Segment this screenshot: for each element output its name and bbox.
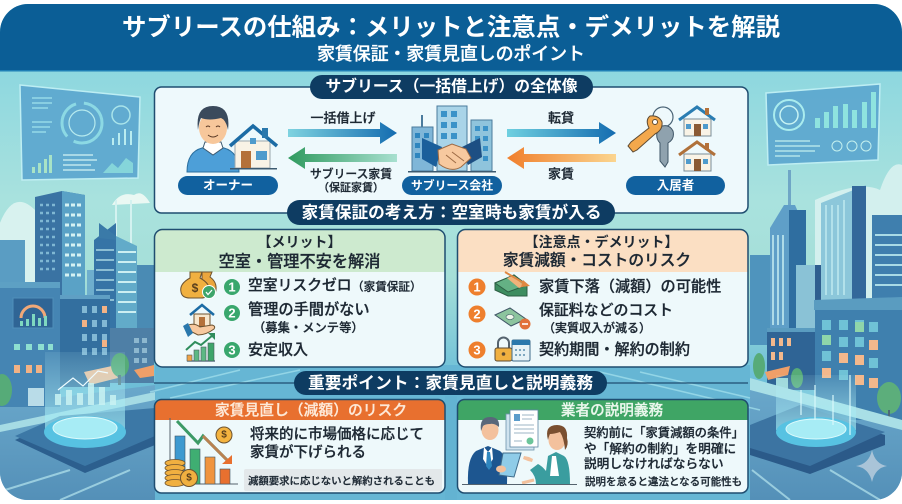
merit item 1: 空室リスクゼロ	[248, 277, 352, 294]
demerit item 2	[468, 302, 673, 335]
sparkle mark	[856, 450, 887, 482]
duty body text: 説明を怠ると違法となる可能性も	[585, 475, 742, 488]
icon: keys	[628, 107, 673, 167]
arrow: rent: 家賃	[548, 166, 574, 182]
icon: businesswoman	[462, 425, 577, 485]
icon: blue roof house	[679, 107, 715, 136]
heading pill: rent guarantee: 家賃保証の考え方：空室時も家賃が入る	[302, 202, 602, 222]
icon: rising chart	[186, 333, 215, 361]
risk body text: 家賃が下げられる	[250, 443, 366, 461]
label: sublease company	[402, 176, 502, 195]
right front building	[815, 308, 902, 420]
demerit item 1: 1	[473, 280, 481, 294]
duty header text: 業者の説明義務	[561, 402, 663, 419]
label: tenant	[626, 176, 725, 195]
demerits heading: 【注意点・デメリット】	[524, 234, 678, 250]
icon: company buildings and handshake	[408, 106, 496, 172]
title: サブリースの仕組み：メリットと注意点・デメリットを解説	[122, 14, 781, 42]
arrow: master lease: 一括借上げ	[310, 110, 376, 126]
icon: money bags	[181, 272, 216, 298]
icon: padlock and calendar	[495, 338, 530, 361]
icon: businessman with tablet	[468, 417, 521, 484]
left floating dashboard	[20, 85, 140, 180]
chart: falling rent: $	[186, 472, 192, 484]
merit item 2: （募集・メンテ等）	[253, 320, 364, 335]
heading pill: key points: 重要ポイント：家賃見直しと説明義務	[308, 372, 593, 392]
right floating dashboard	[766, 84, 880, 165]
duty body text: 説明しなければならない	[584, 456, 724, 471]
panel: cautions and demerits	[458, 230, 748, 367]
risk body text: 将来的に市場価格に応じて	[250, 425, 424, 443]
heading pill: overall picture	[310, 75, 593, 99]
demerit item 2: 2	[473, 306, 481, 322]
icon: bill with minus	[495, 308, 530, 330]
merit item 1: 1	[228, 280, 236, 294]
arrow: sublet	[507, 110, 616, 144]
label: owner: オーナー	[203, 178, 253, 192]
right road and platform	[750, 378, 902, 430]
panel: overall structure	[154, 87, 748, 213]
merit item 2: 2	[228, 306, 236, 320]
demerit item 3	[468, 342, 690, 358]
risk note box	[244, 469, 442, 491]
merits heading: 空室・管理不安を解消	[219, 253, 380, 271]
front building with gauge sign	[0, 282, 60, 407]
demerit item 2: （実質収入が減る）	[543, 320, 651, 335]
icon: cash with falling arrow	[495, 272, 530, 296]
duty body text: 契約前に「家賃減額の条件」	[584, 425, 744, 440]
heading pill: rent guarantee	[287, 200, 615, 225]
arrow: rent	[507, 147, 616, 182]
panel: explanation duty	[458, 400, 748, 493]
arrow: sublease rent: サブリース家賃	[310, 167, 392, 181]
merits heading: 【メリット】	[258, 234, 342, 250]
left city buildings	[0, 191, 155, 500]
panel: merits	[154, 230, 445, 367]
arrow: sublet: 転貸	[548, 110, 574, 126]
merit item 3: 3	[228, 342, 236, 358]
subtitle: 家賃保証・家賃見直しのポイント	[317, 44, 585, 64]
icon: owner and house	[187, 106, 277, 172]
demerit item 3: 3	[473, 342, 481, 358]
duty body text: や「解約の制約」を明確に	[584, 441, 736, 456]
demerit item 2: 保証料などのコスト	[539, 302, 673, 319]
icon: brown roof house	[679, 142, 715, 171]
chart: falling rent	[165, 418, 238, 486]
merits heading	[219, 234, 380, 271]
arrow: sublease rent	[288, 147, 397, 194]
icon: money bags: $	[192, 281, 199, 295]
label: sublease company: サブリース会社	[411, 178, 493, 192]
demerit item 1: 家賃下落（減額）の可能性	[539, 278, 721, 296]
heading pill: overall picture: サブリース（一括借上げ）の全体像	[326, 76, 578, 96]
merit item 3: 安定収入	[248, 342, 308, 358]
header band	[0, 4, 902, 72]
panel: rent review risk	[154, 400, 445, 493]
duty body text	[584, 425, 744, 488]
risk header text: 家賃見直し（減額）のリスク	[215, 402, 407, 419]
merit item 1: （家賃保証）	[352, 280, 422, 294]
icon: document	[506, 410, 538, 450]
label: tenant: 入居者	[657, 178, 694, 192]
demerits heading	[503, 234, 691, 270]
demerits heading: 家賃減額・コストのリスク	[503, 252, 691, 270]
merit item 2: 管理の手間がない	[248, 300, 370, 318]
road surface	[0, 385, 155, 500]
left road and platform	[0, 392, 155, 432]
label: owner	[178, 176, 278, 195]
chart: falling rent: $	[221, 430, 227, 440]
demerit item 3: 契約期間・解約の制約	[539, 342, 690, 358]
arrow: sublease rent: （保証家賃）	[318, 180, 384, 194]
right city buildings	[750, 164, 902, 500]
arrow: master lease	[288, 110, 397, 144]
risk body text	[250, 425, 424, 461]
risk note box: 減額要求に応じないと解約されることも	[248, 474, 435, 488]
divider lines beside pill	[154, 382, 748, 384]
merit item 2	[224, 300, 370, 335]
icon: house on hand	[183, 305, 215, 337]
merit item 1	[224, 277, 422, 295]
